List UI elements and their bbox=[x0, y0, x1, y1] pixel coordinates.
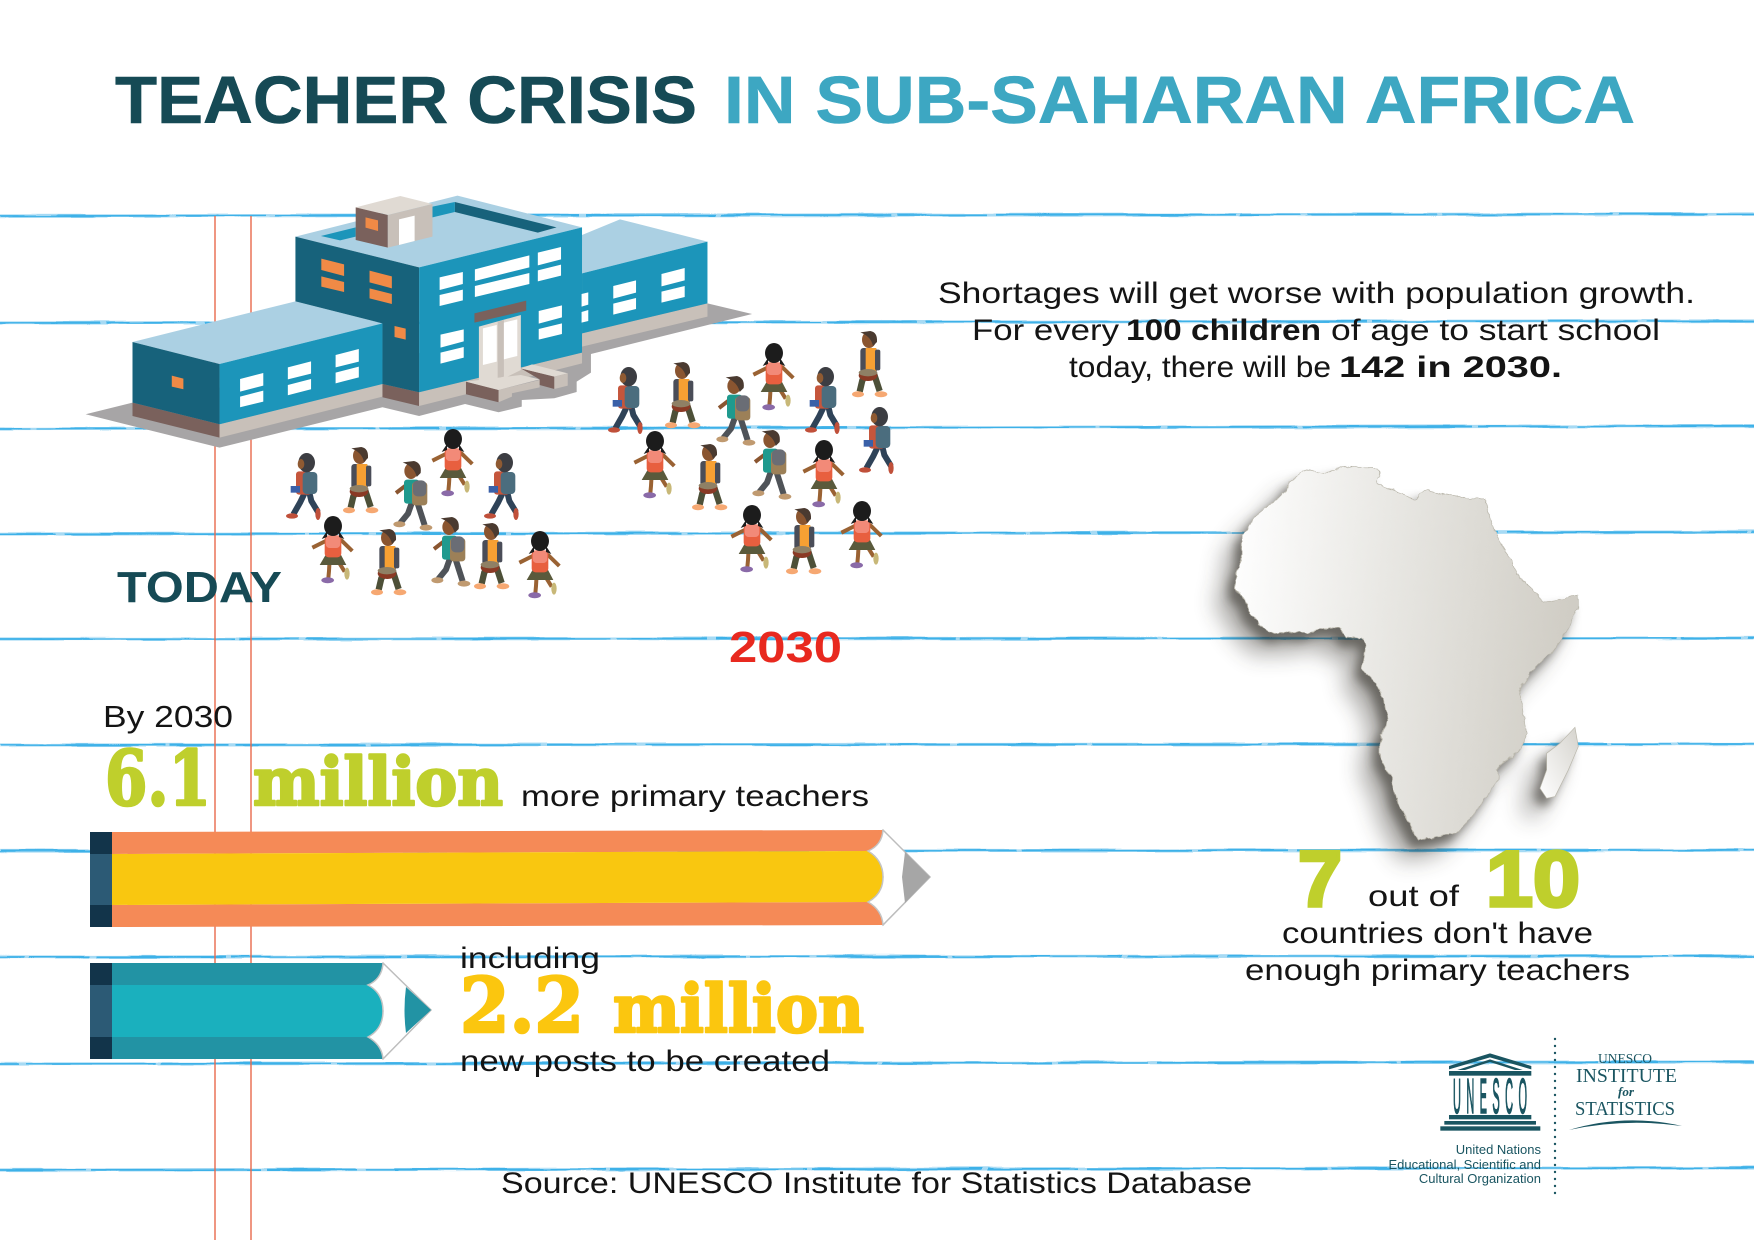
logo: UNESCO Institute for Statistics: for bbox=[1618, 1084, 1635, 1099]
logo: UNESCO Institute for Statistics: INSTITUTE bbox=[1576, 1065, 1677, 1087]
label: 2030: 2030 bbox=[729, 623, 842, 672]
stat: 2.2 million new posts: new posts to be created bbox=[460, 1045, 830, 1078]
logo: UNESCO temple: Educational, Scientific and bbox=[1389, 1157, 1541, 1172]
text: population growth bbox=[938, 277, 1695, 384]
text: population growth: For every bbox=[972, 314, 1119, 347]
rooftop cube bbox=[356, 196, 432, 248]
stat: 6.1 million teachers bbox=[103, 699, 869, 823]
logo: UNESCO temple: Cultural Organization bbox=[1419, 1171, 1541, 1186]
pencil: 6.1 million bbox=[90, 830, 930, 927]
ruled notebook lines bbox=[0, 214, 1754, 1170]
text: population growth: Shortages will get worse with population growth. bbox=[938, 277, 1695, 310]
logo: UNESCO temple: UNESCO bbox=[1453, 1069, 1527, 1124]
title: IN SUB-SAHARAN AFRICA bbox=[724, 63, 1635, 138]
text: population growth: 100 children bbox=[1126, 314, 1321, 347]
logo: UNESCO Institute for Statistics bbox=[1569, 1052, 1682, 1130]
stat: 6.1 million teachers: By 2030 bbox=[103, 699, 233, 734]
stat: 2.2 million new posts: including bbox=[460, 942, 600, 975]
stat: 7 out of 10: countries don't have bbox=[1282, 917, 1593, 950]
logo: UNESCO temple bbox=[1389, 1053, 1541, 1186]
logo divider dots bbox=[1554, 1039, 1556, 1199]
stat: 6.1 million teachers: million bbox=[253, 743, 503, 821]
stat: 7 out of 10: 7 bbox=[1298, 834, 1342, 923]
stat: 2.2 million new posts: million bbox=[613, 970, 864, 1048]
text: population growth: today, there will be bbox=[1069, 351, 1331, 384]
logo: UNESCO Institute for Statistics: STATISTICS bbox=[1575, 1098, 1675, 1120]
stat: 6.1 million teachers: more primary teachers bbox=[521, 780, 869, 813]
illustration: students 2030 bbox=[608, 331, 894, 574]
title bbox=[115, 63, 1635, 138]
map: Africa paper cut-out bbox=[1217, 467, 1578, 861]
stat: 2.2 million new posts bbox=[460, 942, 864, 1078]
text: population growth: 142 in 2030. bbox=[1339, 351, 1562, 384]
logo: UNESCO Institute for Statistics: UNESCO bbox=[1598, 1052, 1652, 1067]
source note: Source: UNESCO Institute for Statistics Database bbox=[501, 1167, 1252, 1200]
Madagascar bbox=[1540, 727, 1578, 798]
label: today: TODAY bbox=[117, 563, 282, 612]
illustration: school building bbox=[86, 196, 752, 448]
stat: 6.1 million teachers: 6.1 bbox=[105, 734, 211, 823]
pencil: 2.2 million bbox=[90, 963, 431, 1059]
Africa mainland bbox=[1235, 467, 1578, 840]
stat: 7 out of 10: 10 bbox=[1486, 834, 1580, 923]
title: TEACHER CRISIS bbox=[115, 63, 697, 138]
logo: UNESCO temple: United Nations bbox=[1456, 1142, 1541, 1157]
stat: 7 out of 10: out of bbox=[1368, 880, 1460, 913]
stat: 2.2 million new posts: 2.2 bbox=[460, 961, 584, 1050]
stat: 7 out of 10 bbox=[1245, 834, 1630, 987]
text: population growth: of age to start school bbox=[1331, 314, 1660, 347]
stat: 7 out of 10: enough primary teachers bbox=[1245, 954, 1630, 987]
notebook margin lines bbox=[215, 216, 251, 1240]
illustration: students today bbox=[286, 429, 559, 598]
